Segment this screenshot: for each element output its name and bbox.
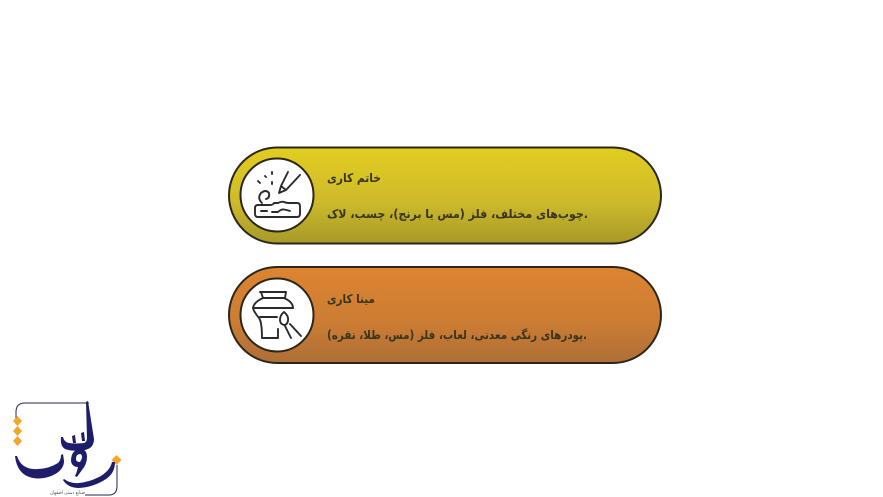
pill background orange bbox=[229, 267, 661, 363]
icon: khatam inlay tool bbox=[240, 158, 314, 232]
logo frame bbox=[16, 403, 117, 495]
title: khatam kari: خاتم کاری bbox=[327, 171, 381, 185]
logo bbox=[13, 401, 122, 496]
icon: enamel vase and brush bbox=[240, 278, 314, 352]
materials text: mina kari: پودرهای رنگی معدنی، لعاب، فلز (مس، طلا، نقره). bbox=[327, 328, 587, 343]
pill background yellow bbox=[229, 148, 661, 244]
logo calligraphy bbox=[15, 401, 115, 488]
logo caption: صنایع دستی اصفهان bbox=[50, 490, 85, 496]
logo diamonds bbox=[13, 416, 122, 465]
panel: mina kari bbox=[229, 267, 661, 363]
materials text: khatam kari: چوب‌های مختلف، فلز (مس یا برنج)، چسب، لاک. bbox=[327, 207, 588, 222]
panel: khatam kari bbox=[229, 148, 661, 244]
title: mina kari: مینا کاری bbox=[327, 292, 375, 306]
